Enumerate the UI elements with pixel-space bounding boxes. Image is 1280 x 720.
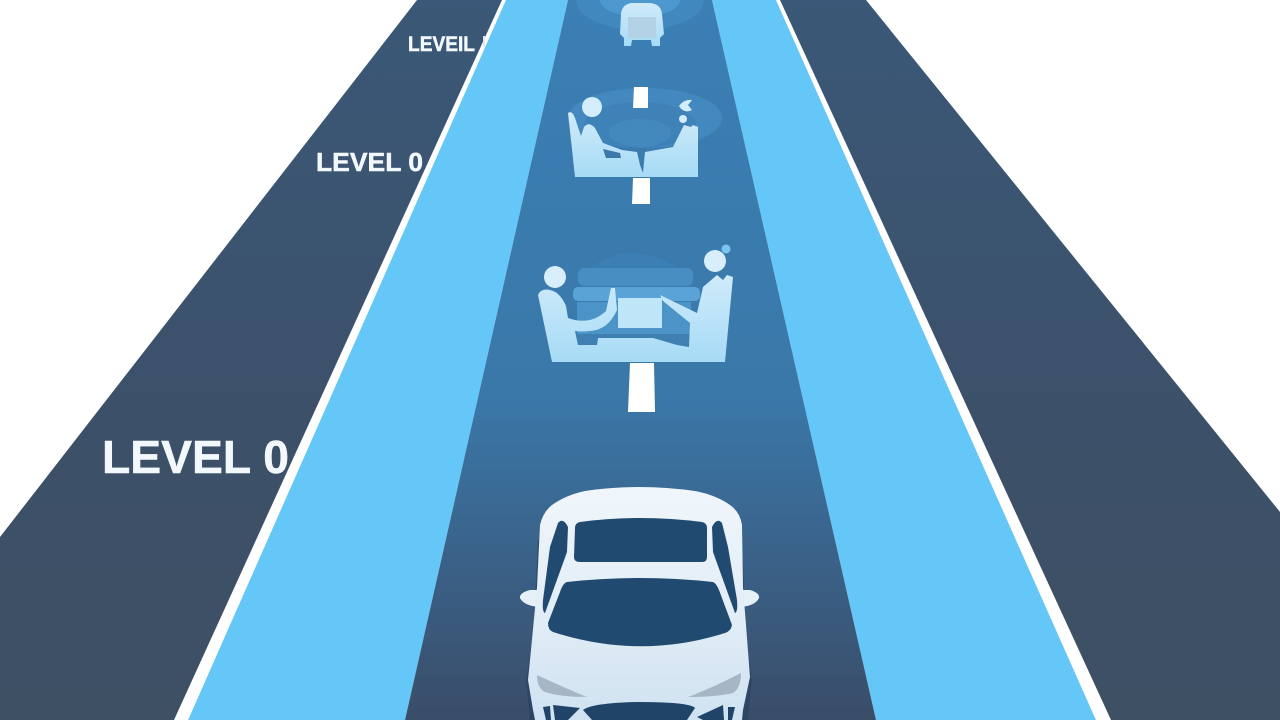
- rear window: [574, 518, 707, 562]
- left light-blue lane: [188, 0, 568, 720]
- seats, arms and table: [538, 275, 733, 362]
- left white edge line: [174, 0, 506, 720]
- label: far level: LEVEIL: [408, 33, 475, 56]
- person left: [582, 97, 602, 117]
- lane dash 1: [633, 87, 648, 108]
- left side window: [543, 521, 568, 613]
- lane dash 3: [628, 363, 655, 412]
- central road: [405, 0, 876, 720]
- label: near level: LEVEL 0: [102, 431, 289, 483]
- car body: [528, 487, 750, 720]
- left dark shoulder: [0, 0, 503, 720]
- book: [618, 298, 662, 328]
- mirrors: [520, 590, 538, 607]
- label: middle level: LEVEL 0: [316, 147, 423, 177]
- right dark shoulder: [778, 0, 1280, 720]
- headlight right: [688, 673, 741, 697]
- lane dash 2: [632, 178, 650, 204]
- right side window: [712, 521, 737, 613]
- person right: [704, 250, 726, 272]
- third scene: two people with book and sensor rings: [538, 244, 733, 362]
- windshield: [548, 578, 732, 646]
- person right: [679, 115, 687, 123]
- right light-blue lane: [712, 0, 1096, 720]
- car shadow: [526, 540, 752, 720]
- car: [520, 487, 759, 720]
- grille: [583, 702, 695, 720]
- person left: [544, 266, 566, 288]
- far scene: seat with sensor rings: [576, 0, 704, 46]
- lower vents: [553, 705, 580, 720]
- second scene: two people and sensor rings: [568, 88, 722, 177]
- right white edge line: [776, 0, 1111, 720]
- headlight left: [537, 675, 587, 697]
